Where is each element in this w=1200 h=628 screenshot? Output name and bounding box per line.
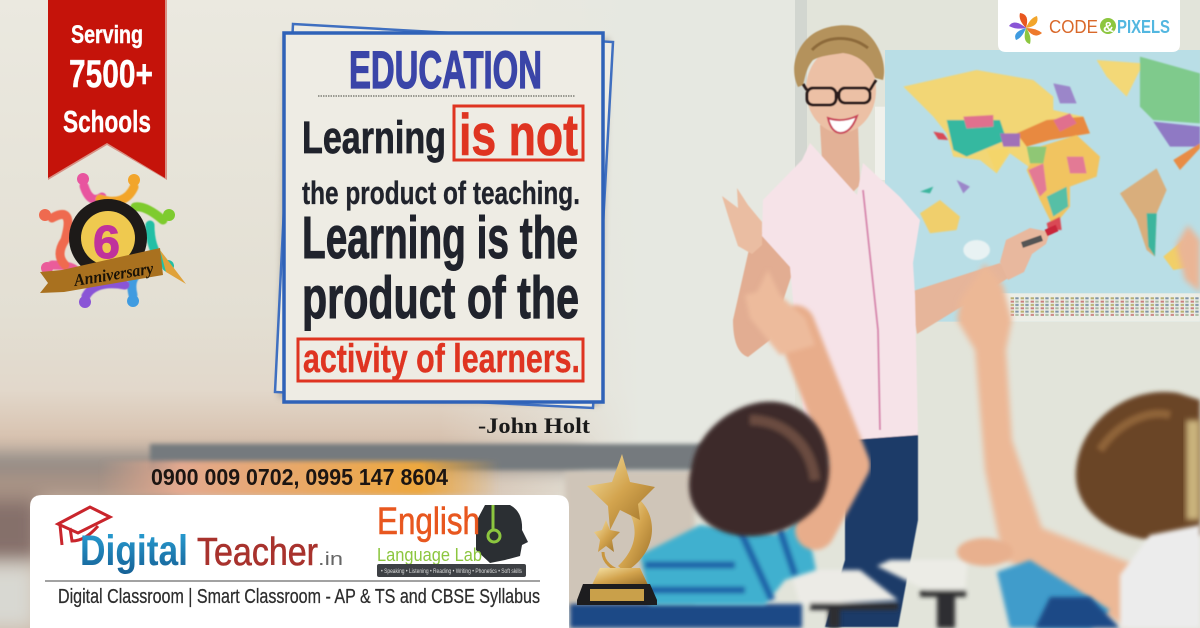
background: classroom wall	[0, 0, 807, 628]
marker in hand	[1022, 238, 1042, 245]
teacher trousers	[825, 432, 918, 627]
logo: english language lab: Language Lab	[377, 545, 482, 565]
highlight: activity of learners: activity of learners.	[303, 337, 580, 381]
card paper	[275, 24, 613, 408]
marker tip	[1046, 228, 1057, 233]
card shadow	[278, 36, 610, 406]
logo: english language lab: English	[377, 501, 480, 543]
second child hand	[1176, 225, 1200, 292]
quote line 2: the product of teaching.	[302, 175, 580, 211]
tagline: Digital Classroom | Smart Classroom - AP & TS and CBSE Syllabus	[58, 586, 540, 608]
teacher raised arm	[733, 232, 795, 357]
teacher shirt	[762, 143, 920, 440]
badge: 6th anniversary: 6	[93, 216, 120, 268]
world map	[875, 50, 1200, 322]
child shirt blue	[997, 560, 1110, 628]
desk centre	[790, 570, 898, 628]
teacher hand	[722, 188, 762, 254]
phone numbers	[100, 461, 500, 495]
logo: english language lab: • Speaking • Listening • Reading • Writing • Phonetics • Soft skills	[381, 568, 523, 575]
mortarboard	[58, 507, 110, 545]
boy hand	[745, 270, 815, 355]
child fist on desk	[957, 538, 1013, 566]
heading: education: EDUCATION	[349, 41, 542, 100]
teacher neck	[820, 125, 860, 195]
boy striped shirt	[640, 515, 816, 605]
card blue frame	[284, 33, 603, 402]
child hair	[1076, 392, 1200, 540]
teacher smile	[828, 116, 857, 133]
ribbon: serving 7500+ schools: Schools	[63, 104, 151, 139]
child blonde head edge	[1186, 420, 1200, 520]
logo: code and pixels: PIXELS	[1117, 17, 1170, 37]
ribbon: serving 7500+ schools	[48, 0, 167, 180]
chair back	[570, 604, 802, 628]
teacher pointing hand	[1000, 228, 1050, 280]
quote line 3: Learning is the	[302, 205, 578, 271]
logo: digital teacher: Digital	[80, 527, 188, 575]
quote line 4: product of the	[302, 265, 579, 331]
logo: code and pixels: &	[1103, 19, 1114, 36]
trophy	[577, 454, 657, 605]
logo: code and pixels: CODE	[1049, 17, 1098, 37]
badge people figures	[52, 186, 163, 296]
logo: code and pixels	[998, 0, 1180, 52]
logo: digital teacher: .in	[318, 549, 343, 569]
desk right	[877, 560, 968, 628]
logo: digital teacher: Teacher	[197, 531, 318, 574]
logo panel	[30, 495, 569, 628]
boy raised arm	[745, 270, 850, 530]
boy hair	[689, 402, 829, 536]
quote card	[275, 24, 613, 408]
child raised arm	[957, 264, 1135, 626]
badge: 6th anniversary: Anniversary	[72, 259, 155, 290]
ribbon: serving 7500+ schools: Serving	[71, 21, 143, 49]
child shirt white	[1120, 525, 1200, 628]
ribbon: serving 7500+ schools: 7500+	[69, 53, 153, 96]
teacher glasses	[803, 80, 876, 105]
teacher	[722, 25, 1057, 627]
highlight: is not: is not	[459, 103, 578, 168]
pinwheel icon	[1009, 13, 1042, 44]
phone numbers: 0900 009 0702, 0995 147 8604	[151, 464, 448, 490]
students	[570, 225, 1200, 628]
logo: english language lab	[377, 501, 528, 577]
teacher head	[806, 47, 876, 133]
child chair	[1035, 597, 1120, 628]
teacher hair	[794, 25, 884, 87]
logo: digital teacher	[58, 507, 343, 575]
head silhouette	[476, 505, 528, 563]
attribution: -John Holt	[478, 413, 591, 438]
quote line 1: Learning	[302, 112, 446, 163]
teacher arm pointing at map	[910, 263, 1010, 334]
badge: 6th anniversary	[39, 173, 186, 308]
